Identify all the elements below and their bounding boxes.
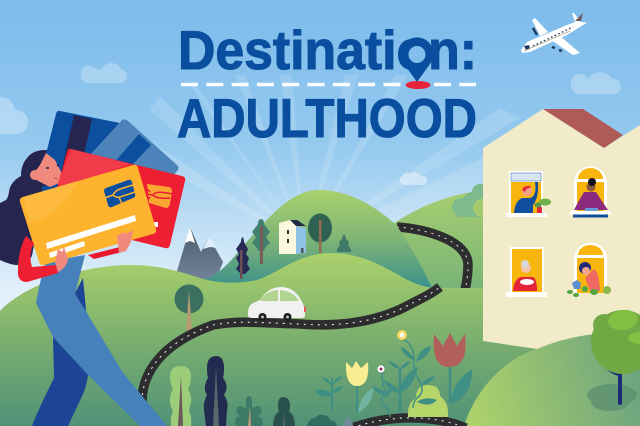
back right hill [390,190,490,300]
light green bush [408,385,448,417]
dark tail [575,13,583,21]
engines [533,28,562,51]
dark navy tree [204,356,228,426]
cloud: upper left [81,63,127,83]
red tulip [434,333,472,405]
window: elderly woman with cat [506,247,547,297]
window: person watering plants [567,242,611,297]
teal plant [315,376,343,412]
face [30,153,62,187]
green leafy tree [235,396,263,426]
small tree [337,235,351,252]
foreground flowers [315,330,472,417]
navy tree trunk [213,367,219,426]
tree shadow [587,384,637,411]
jeans light leg [36,255,167,426]
dark tree trunk [240,250,242,279]
dark blue credit card [42,111,135,225]
location pin [401,37,434,89]
hair [0,150,62,265]
sun rays [112,75,560,245]
dark green tree trunk [283,410,285,426]
small gray tree [342,417,353,426]
red sleeve [18,236,58,282]
canopy highlights [607,308,639,332]
jeans dark leg [32,278,88,426]
tree on left hill [174,284,204,330]
main winding road [142,287,440,402]
tree trunk [603,361,620,403]
card small stripe [49,241,85,258]
window: woman leaning [570,166,611,218]
right hand [117,230,133,253]
house body [483,109,640,349]
yellow tulip [346,361,373,413]
card stripe [46,215,136,249]
right tree [587,308,640,411]
orange chip [146,184,172,208]
dark green tree [273,397,295,426]
steel blue credit card [90,119,178,205]
tree canopy [591,310,640,374]
shirt collar [42,186,50,192]
bushes behind house [452,184,491,217]
upper wing [532,18,548,36]
teal tree trunk [260,226,263,264]
central hill [203,190,433,300]
teal leafy plant [383,361,418,412]
cloud: far left [0,97,28,134]
house [483,109,640,349]
leafy tree trunk [248,406,251,426]
upper road segment [397,227,468,290]
light green tree [170,366,191,426]
lower wing [548,36,580,55]
round tree [308,214,332,242]
tail fin [572,13,580,22]
red credit card [48,149,185,248]
belly stripe [524,31,570,51]
airplane [521,13,587,55]
title [177,19,477,149]
yellow credit card [20,165,156,265]
far arm sleeve [88,247,122,259]
cloud: small center [400,172,427,185]
light tree trunk [178,376,183,426]
roof [543,109,623,148]
white car [248,287,306,321]
teal tree [252,219,270,251]
yellow flower with vine [397,330,437,408]
lower road segment [352,418,466,426]
cloud: upper right [571,72,621,94]
canopy highlight right [628,332,640,344]
front right hill [464,332,640,426]
cockpit [524,45,530,50]
dark tree [236,237,250,274]
blue chip [104,180,135,207]
round tree trunk [319,220,322,253]
left big hill and main ground [0,253,640,426]
dashed road line [181,83,476,86]
hilltop trees [236,214,351,279]
left hand [55,247,68,272]
hilltop white house [279,220,306,254]
title line: Destination: Destination: [178,19,477,81]
foreground trees [170,356,353,426]
fuselage [521,21,587,53]
green bush [307,415,337,426]
title line: Adulthood: ADULTHOOD [177,87,477,149]
cabin windows [533,27,573,46]
mountains [177,227,223,282]
small pink flower with vine [372,366,395,417]
woman carrying credit cards [0,111,185,426]
window: man waving [506,171,551,217]
